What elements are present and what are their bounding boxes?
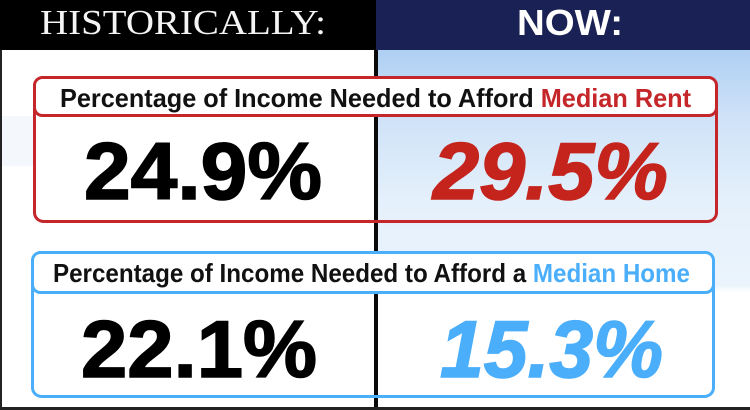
value: current rent: 29.5%: [431, 127, 668, 217]
header band: now: [376, 0, 750, 50]
bottom frame edge: [0, 407, 750, 410]
value: current home: 15.3%: [440, 305, 663, 395]
panel: now background: [376, 49, 750, 407]
header band: historically: [0, 0, 376, 50]
panel: median rent: [34, 78, 716, 222]
value: historical home: 22.1%: [81, 305, 317, 395]
center divider: [374, 49, 378, 407]
header band: historically: HISTORICALLY:: [40, 3, 326, 42]
panel: median home: [32, 252, 714, 396]
panel: historically background: [0, 0, 376, 410]
value: historical rent: 24.9%: [84, 127, 322, 217]
left frame edge: [0, 0, 2, 410]
heading: median rent: Percentage of Income Needed to Afford Median Rent: [60, 83, 691, 113]
header band: now: NOW:: [517, 2, 623, 43]
heading: median home: Percentage of Income Needed to Afford a Median Home: [53, 258, 690, 288]
